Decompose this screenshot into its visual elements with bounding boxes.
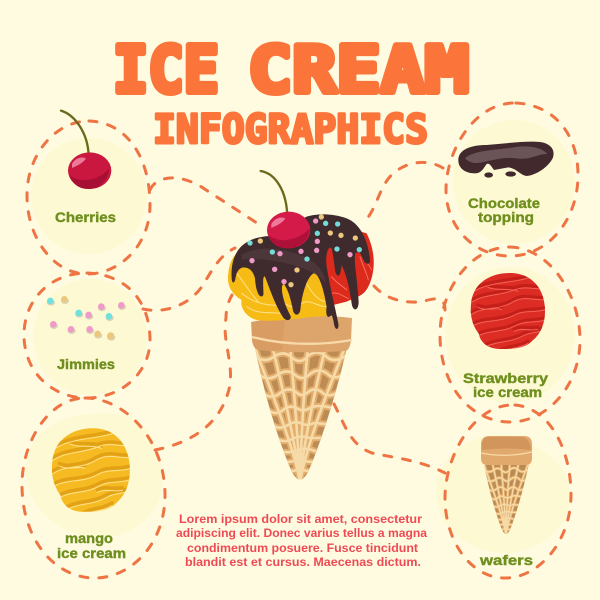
panel: chocolate topping — [446, 103, 578, 256]
label: mango ice cream: mango — [65, 530, 113, 546]
panel: jimmies — [24, 273, 150, 398]
text block: lorem ipsum: Lorem ipsum dolor sit amet, consectetur — [179, 514, 423, 526]
connector: cherries to ice cream — [150, 178, 263, 227]
panel: wafers — [436, 405, 571, 578]
label: chocolate topping: topping — [478, 209, 534, 225]
icon: cherry — [61, 111, 111, 189]
text block: lorem ipsum: blandit est et cursus. Maecenas dictum. — [185, 557, 421, 569]
subtitle: Infographics: INFOGRAPHICS — [153, 107, 428, 153]
panel: mango ice cream — [22, 398, 165, 578]
label: mango ice cream — [57, 530, 126, 561]
connector: wafers to cone — [334, 404, 445, 473]
sprinkles — [247, 214, 362, 287]
text block: lorem ipsum — [176, 514, 428, 569]
label: cherries: Cherries — [55, 209, 116, 225]
icon: strawberry scoop — [470, 273, 546, 353]
label: strawberry ice cream: Strawberry — [463, 370, 548, 386]
cherry on top — [261, 171, 310, 248]
icon: mango scoop — [51, 428, 131, 517]
waffle cone — [251, 316, 352, 480]
connector: jimmies to ice cream — [143, 248, 235, 310]
yellow scoop — [228, 255, 328, 321]
main ice cream cone illustration — [228, 171, 374, 485]
icon: jimmies sprinkles — [47, 296, 126, 341]
title word: Ice: ICE — [113, 34, 219, 108]
title word: Cream: CREAM — [248, 34, 469, 108]
label: strawberry ice cream — [463, 370, 548, 400]
icon: small wafer cone — [481, 436, 532, 534]
label: wafers: wafers — [479, 552, 533, 568]
panel: strawberry ice cream — [440, 247, 580, 422]
chocolate highlight — [242, 249, 326, 283]
label: chocolate topping: Chocolate — [468, 195, 540, 211]
label: strawberry ice cream: ice cream — [473, 384, 542, 400]
icon: chocolate blob — [458, 142, 554, 178]
label: jimmies: Jimmies — [57, 356, 115, 372]
connector: mango to cone — [155, 295, 232, 450]
red scoop — [310, 217, 374, 307]
scoops and chocolate, drawn in a 3x coordinate space — [228, 171, 374, 329]
label: mango ice cream: ice cream — [57, 545, 126, 561]
panel: cherries — [27, 111, 150, 274]
connector: strawberry to ice cream — [374, 286, 445, 310]
connector: chocolate to ice cream — [362, 162, 443, 224]
title — [113, 34, 469, 153]
scoop texture — [237, 257, 372, 315]
text block: lorem ipsum: condimentum posuere. Fusce tincidunt — [187, 543, 418, 555]
label: chocolate topping — [468, 195, 540, 225]
text block: lorem ipsum: adipiscing elit. Donec varius tellus a magna — [176, 528, 428, 540]
chocolate topping with drips — [232, 214, 370, 329]
